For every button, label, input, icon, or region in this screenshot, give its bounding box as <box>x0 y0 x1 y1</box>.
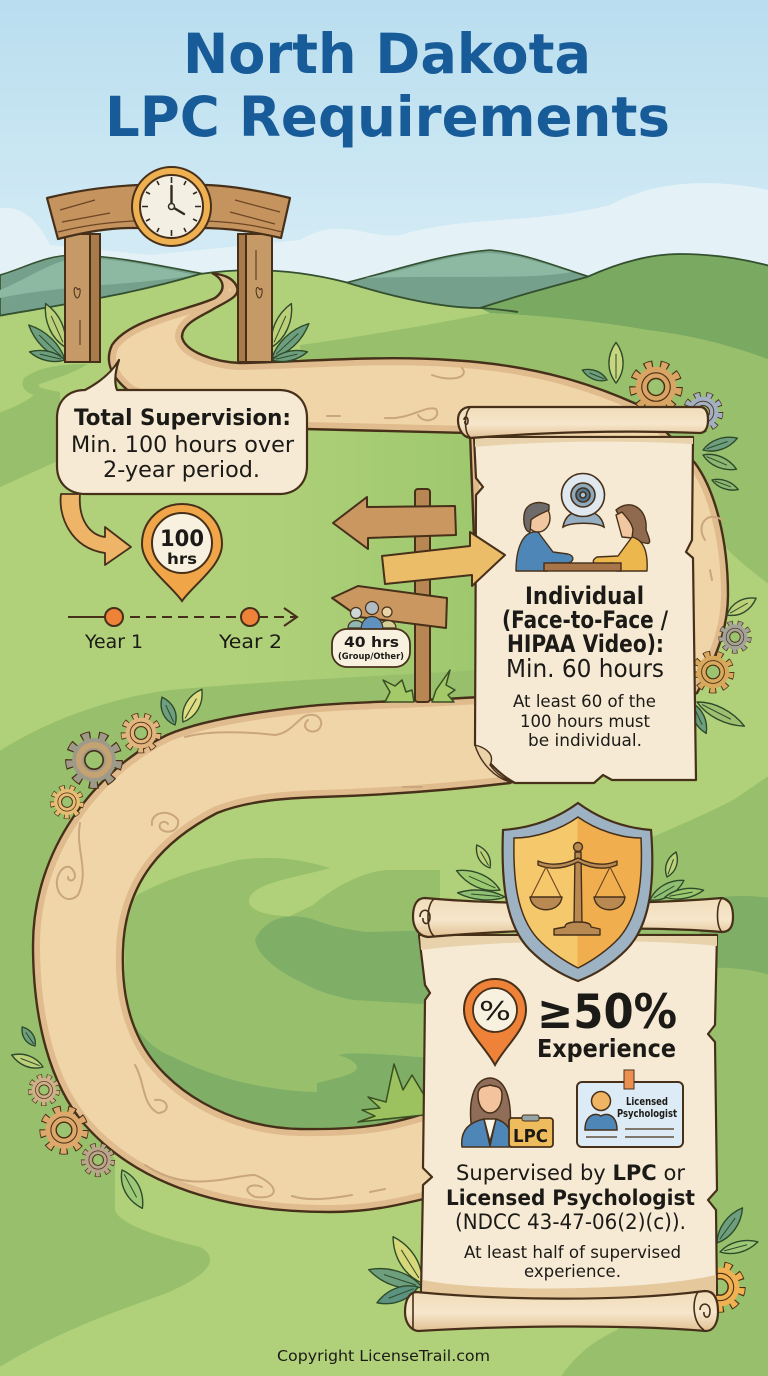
sky background <box>0 0 768 340</box>
callout: total supervision <box>57 360 307 494</box>
note: 60 of 100: be individual. <box>528 731 642 751</box>
leaves behind shield <box>454 842 704 905</box>
sign: left arrow <box>333 497 456 549</box>
icon: LPC supervisor <box>462 1078 512 1147</box>
text: supervised by: Supervised by LPC or <box>456 1161 685 1185</box>
heading: individual: Individual <box>525 582 644 610</box>
label year 1: Year 1 <box>84 632 143 653</box>
timeline <box>68 608 297 653</box>
callout: total supervision: 2-year period. <box>103 458 260 483</box>
curved arrow <box>61 494 131 565</box>
gate posts <box>65 234 272 362</box>
decoration: gears and leaves by first scroll <box>581 342 759 736</box>
sign: lower left arrow <box>332 586 447 628</box>
heading: individual: HIPAA Video): <box>507 630 664 658</box>
icon: webcam <box>562 474 604 527</box>
heading: individual <box>502 582 668 658</box>
clock <box>132 167 211 246</box>
gate beam <box>47 185 290 239</box>
callout heading: Total Supervision: <box>74 406 291 431</box>
right dark hill <box>480 254 768 360</box>
decoration: gears and leaves on road bend <box>53 686 208 816</box>
leaves by lower scroll <box>366 1204 759 1309</box>
text: supervised by: Licensed Psychologist <box>446 1186 695 1210</box>
value: min 60 hours: Min. 60 hours <box>506 654 664 683</box>
signpost <box>332 489 505 702</box>
heading: individual: (Face-to-Face / <box>502 606 668 634</box>
scroll paper <box>474 437 696 783</box>
icon: percent pin: % <box>479 997 511 1027</box>
text: supervised by <box>446 1161 695 1234</box>
stat label: experience: Experience <box>537 1034 676 1063</box>
callout text: Min. 100 hours over <box>71 433 295 458</box>
icon: shield with scales <box>503 803 652 981</box>
top roller <box>413 898 733 937</box>
bottom roller <box>405 1291 718 1331</box>
pin: 100 hrs: 100 <box>160 527 204 552</box>
ground shading patches <box>0 364 768 1376</box>
title <box>105 22 670 149</box>
icon: table <box>544 563 621 571</box>
hill outlines <box>0 254 768 316</box>
mid shading <box>240 430 480 700</box>
stat: 50 percent: ≥50% <box>537 985 677 1040</box>
badge: 40 hrs <box>332 629 410 667</box>
note: half of experience <box>464 1243 681 1282</box>
panel: experience scroll <box>405 898 733 1331</box>
scales of justice <box>530 842 625 935</box>
icon: man in session <box>516 503 573 571</box>
people icon <box>348 602 396 630</box>
title: LPC Requirements <box>105 85 670 149</box>
winding road <box>33 273 728 1212</box>
pin: 100 hrs: hrs <box>167 550 197 568</box>
gate leaves <box>25 301 313 365</box>
icon: LPC badge: LPC <box>513 1126 548 1147</box>
title: North Dakota <box>183 22 591 86</box>
scroll roller <box>458 407 708 438</box>
decoration: gears and leaves at lower bend <box>10 1024 149 1212</box>
icon: psychologist ID card: Psychologist <box>617 1107 677 1120</box>
clouds <box>0 183 768 310</box>
note: 60 of 100: At least 60 of the <box>513 692 656 712</box>
icon: LPC badge <box>509 1115 553 1147</box>
badge: 40 hrs: 40 hrs <box>344 635 399 651</box>
icon: percent pin <box>464 979 526 1065</box>
grass at signpost <box>383 670 455 702</box>
icon: psychologist ID card: Licensed <box>626 1095 668 1108</box>
text: supervised by: (NDCC 43-47-06(2)(c)). <box>455 1210 686 1234</box>
right medium slope <box>300 313 768 585</box>
icon: psychologist ID card <box>577 1070 683 1147</box>
label year 2: Year 2 <box>218 632 282 653</box>
gate with clock <box>25 167 313 365</box>
copyright footer: Copyright LicenseTrail.com <box>277 1347 490 1365</box>
far hills <box>0 250 590 340</box>
grass tuft <box>358 1064 424 1122</box>
pin: 100 hrs <box>142 504 222 601</box>
scroll paper <box>419 935 717 1295</box>
note: half of experience: At least half of supervised <box>464 1243 681 1263</box>
icon: woman in session <box>593 505 650 571</box>
note: 60 of 100 <box>513 692 656 751</box>
badge: 40 hrs: (Group/Other) <box>338 652 404 662</box>
note: half of experience: experience. <box>524 1262 621 1282</box>
panel: individual scroll <box>458 407 708 783</box>
sign: right arrow to individual <box>382 532 505 586</box>
note: 60 of 100: 100 hours must <box>520 712 650 732</box>
